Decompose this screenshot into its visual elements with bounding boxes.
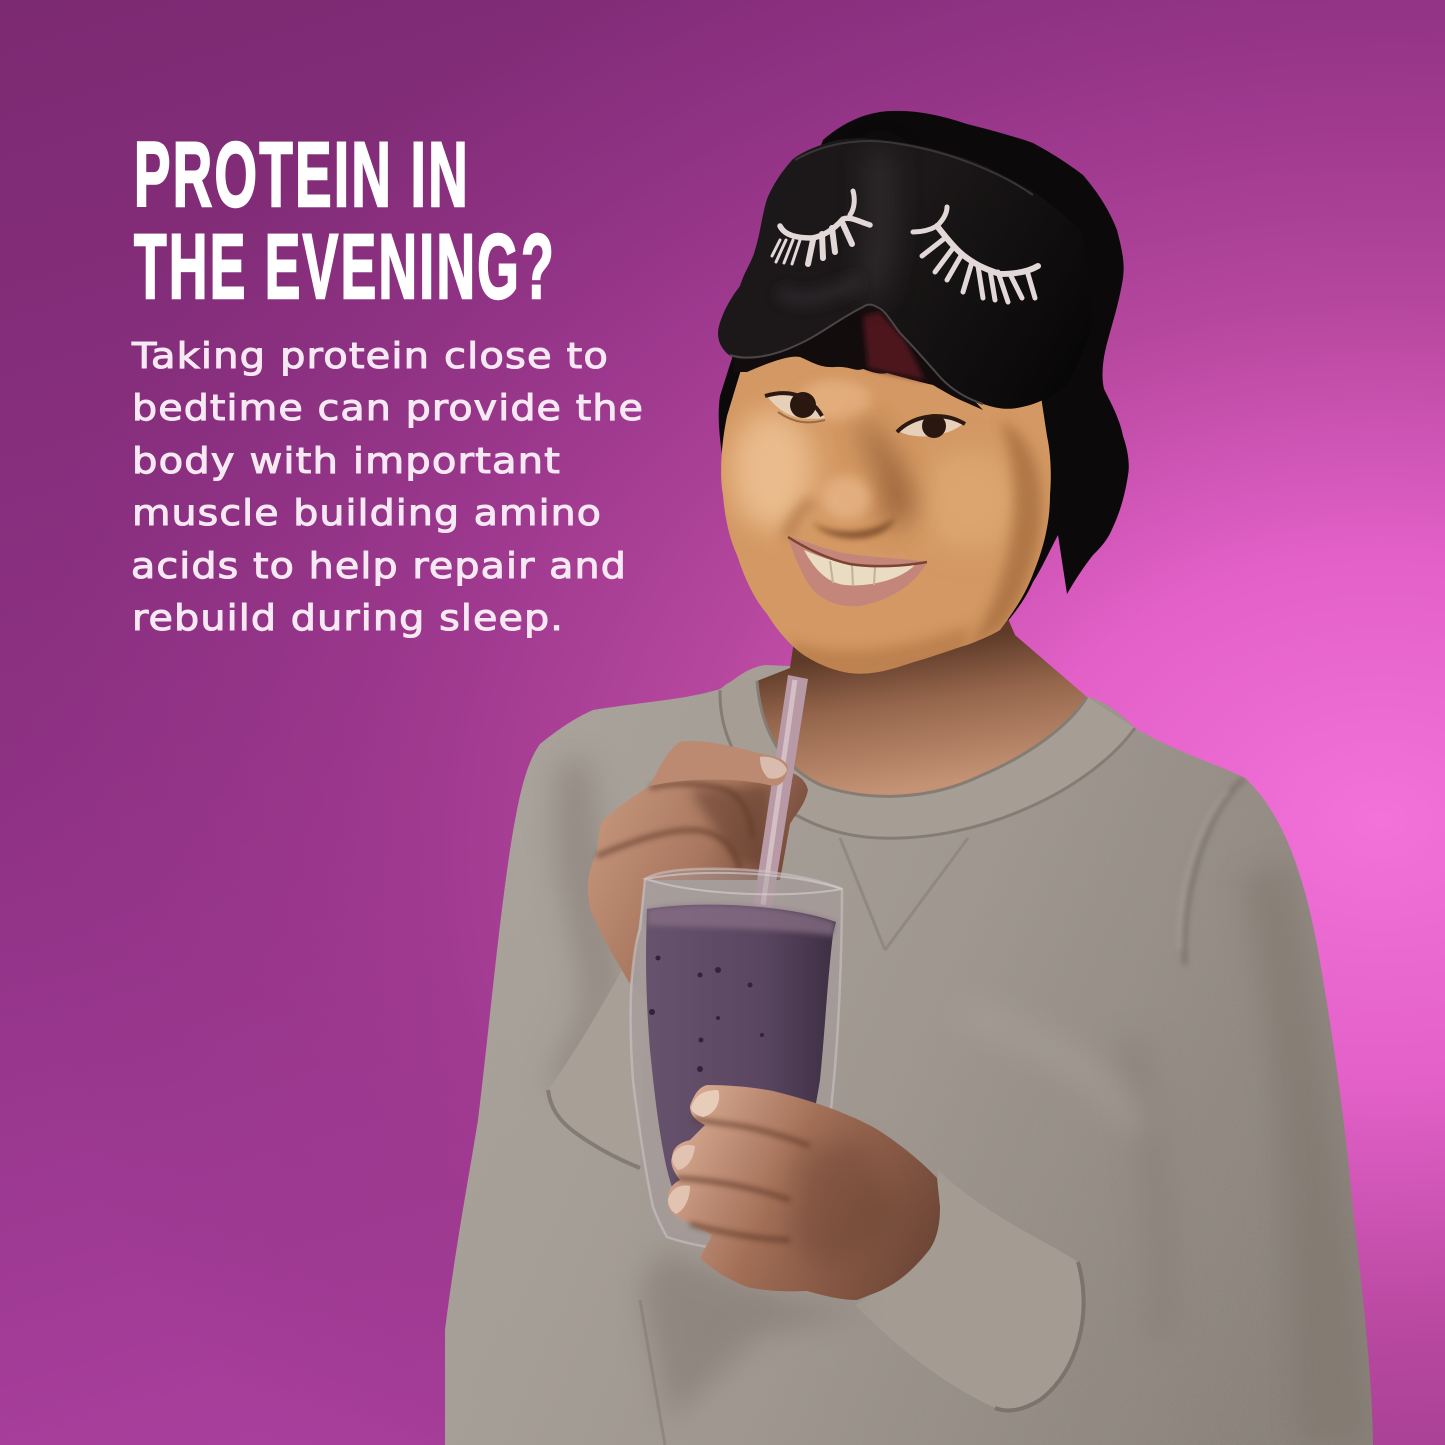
fringe xyxy=(733,300,983,410)
body text: muscle building amino xyxy=(132,493,602,534)
body text: body with important xyxy=(132,441,561,482)
left cuff xyxy=(554,972,626,1090)
nose shadow xyxy=(858,420,915,530)
collar ribbing xyxy=(720,678,1135,838)
title: THE EVENING? xyxy=(134,216,556,318)
jaw shadow xyxy=(969,422,1046,644)
center V stitch xyxy=(840,838,968,950)
index fingertip over straw xyxy=(650,741,788,786)
glass with smoothie xyxy=(631,869,842,1254)
torso folds xyxy=(1130,1040,1163,1340)
hair back xyxy=(719,111,1129,630)
sweatshirt xyxy=(440,660,1380,1445)
body text xyxy=(131,336,644,639)
smile crease left xyxy=(786,500,812,538)
nose tip xyxy=(822,476,870,520)
icon: closed eyelash right xyxy=(913,207,1038,302)
eye right xyxy=(897,414,965,438)
body text: bedtime can provide the xyxy=(132,388,644,429)
eye left xyxy=(765,392,825,422)
fingernails xyxy=(691,1090,719,1117)
neck xyxy=(757,600,1087,796)
left sleeve inner shadow xyxy=(545,760,620,1090)
body text: rebuild during sleep. xyxy=(132,598,564,639)
pocket seam xyxy=(640,1300,665,1445)
forehead highlight xyxy=(799,380,871,420)
person xyxy=(440,111,1380,1445)
hand: lower, holding glass xyxy=(668,1085,940,1300)
mouth xyxy=(788,537,927,606)
title: PROTEIN IN xyxy=(134,124,470,226)
left cheek highlight xyxy=(730,410,814,530)
icon: closed eyelash left xyxy=(772,191,870,264)
shadow under hand xyxy=(640,1254,824,1408)
hand: upper, pinching straw xyxy=(588,741,808,984)
face xyxy=(721,356,1051,674)
straw xyxy=(753,675,808,908)
right side shadow xyxy=(1248,872,1360,1432)
berry specks xyxy=(649,956,764,1072)
body text: Taking protein close to xyxy=(131,336,609,377)
shoulder seam xyxy=(1184,778,1245,965)
right cuff xyxy=(855,1170,1084,1410)
title xyxy=(134,124,556,318)
body text: acids to help repair and xyxy=(131,546,627,587)
sleep mask xyxy=(718,138,1093,409)
right cheek xyxy=(929,457,1008,543)
